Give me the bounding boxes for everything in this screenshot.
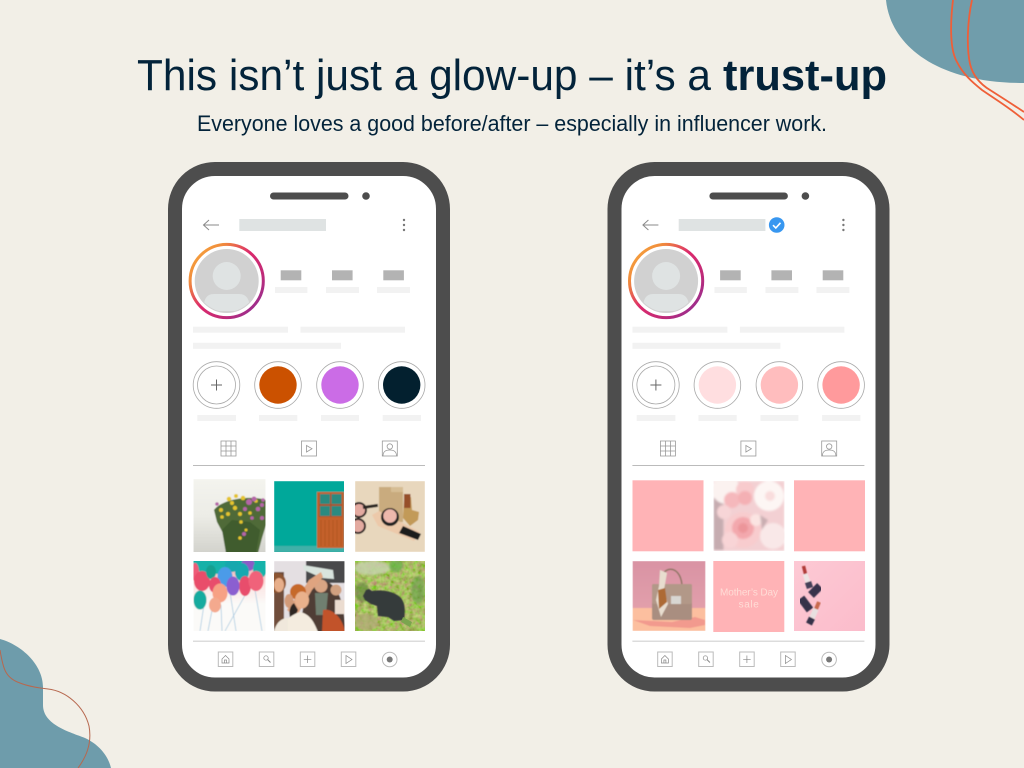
photo: flowers (193, 479, 266, 553)
bottom divider (193, 640, 425, 642)
phone: after (614, 169, 882, 684)
decorative blob: top right (886, 0, 1024, 120)
bio lines (632, 327, 844, 349)
photo: group selfie (268, 561, 345, 632)
profile tab icons (660, 441, 837, 456)
title: This isn’t just a glow-up – it’s a (137, 51, 712, 100)
tab divider (193, 465, 425, 466)
photo: lipsticks (794, 561, 865, 631)
profile avatar with gradient ring (190, 244, 263, 318)
pink tile with text: sale (739, 600, 759, 610)
bottom nav icons (658, 652, 836, 667)
photo: makeup (350, 481, 425, 552)
photo: cat in grass (354, 560, 425, 631)
bottom nav icons (218, 652, 397, 667)
photo: balloons (194, 561, 266, 631)
phone: before (175, 169, 443, 684)
photo: teal wall and door (274, 481, 345, 553)
pink tile (632, 480, 704, 551)
back arrow (204, 220, 219, 230)
profile stats (275, 270, 410, 293)
speaker and camera (709, 192, 809, 200)
bottom divider (632, 640, 864, 642)
phone body (614, 169, 882, 684)
phone body (175, 169, 443, 684)
profile stats (714, 270, 849, 293)
verified badge (769, 217, 784, 233)
back arrow (643, 220, 658, 230)
pink tile with text (713, 561, 784, 632)
photo: peonies (714, 481, 784, 551)
title: trust-up (723, 51, 887, 100)
menu dots (842, 219, 845, 231)
tab divider (632, 465, 864, 466)
decorative blob: bottom left (0, 639, 111, 768)
story highlights (193, 362, 425, 421)
story highlights (633, 362, 864, 421)
username bar (239, 219, 326, 231)
bio lines (193, 327, 405, 349)
profile avatar with gradient ring (630, 244, 703, 318)
menu dots (403, 219, 405, 231)
pink tile with text: Mother’s Day (720, 588, 778, 598)
username bar (679, 219, 765, 231)
speaker and camera (270, 192, 370, 200)
pink tile (794, 480, 865, 551)
profile tab icons (221, 441, 397, 456)
photo: handbag (632, 561, 706, 631)
subtitle: Everyone loves a good before/after – especially in influencer work. (197, 111, 827, 136)
